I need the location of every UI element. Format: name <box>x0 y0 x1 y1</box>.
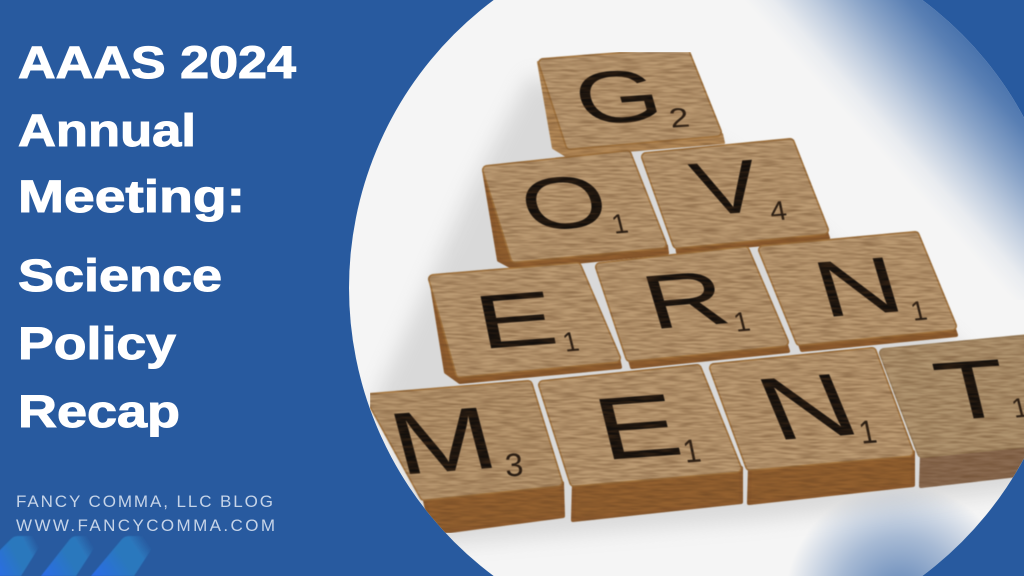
tile: V: 4 <box>767 196 790 227</box>
title line: AAAS 2024: AAAS 2024 <box>18 37 296 88</box>
tile: R <box>600 251 788 367</box>
tile: E (bottom row): E <box>584 374 690 479</box>
tile: R: R <box>632 254 738 346</box>
blue fade: bottom right <box>793 493 978 576</box>
tile: O <box>484 155 667 268</box>
tile: N (row three) <box>763 236 956 350</box>
tile: N (bottom row) <box>714 352 913 503</box>
tile: O: 1 <box>608 208 631 240</box>
footer line: website: WWW.FANCYCOMMA.COM <box>16 516 275 535</box>
tile shadows <box>375 75 1024 545</box>
blue fade: top right <box>763 0 1024 290</box>
tile: T: T <box>925 342 1019 438</box>
tile: M <box>370 385 563 533</box>
subtitle line: Science: Science <box>18 250 222 301</box>
tile: E (row three): 1 <box>559 326 582 358</box>
tile: V <box>646 143 828 252</box>
title <box>18 37 296 222</box>
footer credit <box>16 492 275 535</box>
tile: E (bottom row): 1 <box>680 433 704 470</box>
tile: M: 3 <box>504 446 525 484</box>
tile: N (row three): 1 <box>907 295 930 327</box>
subtitle line: Recap: Recap <box>18 386 180 437</box>
title line: Meeting:: Meeting: <box>18 171 245 222</box>
tile: E (bottom row) <box>543 369 741 520</box>
tile: R: 1 <box>730 306 753 338</box>
tile: T <box>884 338 1024 486</box>
tile: G: G <box>564 53 672 141</box>
subtitle <box>18 250 222 437</box>
subtitle line: Policy: Policy <box>18 318 176 369</box>
tile: N (bottom row): 1 <box>856 414 880 451</box>
tile: E (row three): E <box>468 275 564 366</box>
tile: G <box>538 52 724 156</box>
tile: N (row three): N <box>804 240 913 334</box>
tile: G: 2 <box>666 102 692 134</box>
tile: V: V <box>682 144 772 231</box>
tile: E (row three) <box>431 267 620 382</box>
footer line: blog name: FANCY COMMA, LLC BLOG <box>16 492 273 511</box>
tiles <box>370 52 1024 533</box>
icon: chevron stripes <box>0 536 160 576</box>
tile: N (bottom row): N <box>743 356 872 459</box>
tile: M: M <box>379 388 507 493</box>
tile: O: O <box>510 158 618 247</box>
photo backdrop <box>340 0 1024 576</box>
title line: Annual: Annual <box>18 105 196 156</box>
photo: scrabble tiles spelling GOVERNMENT in a circle <box>340 0 1024 576</box>
